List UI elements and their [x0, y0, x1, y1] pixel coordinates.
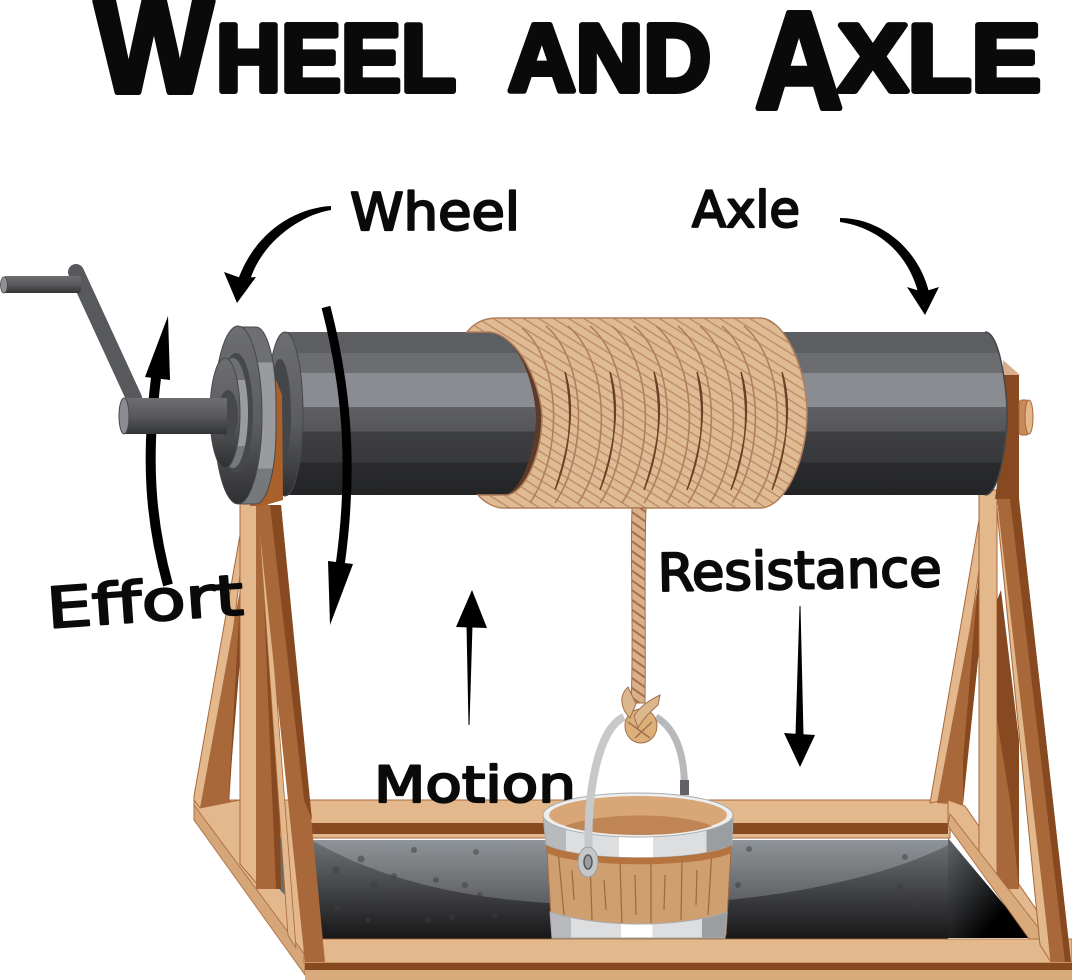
label: wheel: Wheel [350, 183, 520, 243]
wooden frame: right support [930, 360, 1052, 962]
title: HEEL [216, 5, 456, 112]
rotation arrow [326, 307, 353, 625]
wooden frame: back base [228, 800, 1032, 939]
left leg [257, 505, 325, 962]
hole sliver [280, 836, 288, 898]
title: AND [508, 5, 711, 112]
front handle [588, 717, 624, 860]
bucket body [543, 815, 733, 935]
resistance arrow [784, 606, 815, 767]
rope hanging [631, 508, 646, 703]
back handle [656, 717, 684, 795]
label: axle: Axle [692, 181, 800, 239]
right brace [930, 520, 979, 805]
arrow to wheel [224, 206, 331, 303]
label: motion: Motion [374, 756, 576, 814]
left post [240, 500, 257, 884]
rope knot [622, 687, 660, 743]
axle cylinder [283, 332, 1007, 495]
crank handle [0, 272, 227, 434]
bucket bottom metal band [550, 912, 727, 938]
wooden frame: left support [194, 500, 310, 975]
right leg [997, 499, 1071, 962]
bucket top metal band [543, 815, 733, 858]
rope coil shadows [555, 372, 787, 490]
bucket rim and inside [543, 793, 733, 837]
back rail [228, 800, 950, 838]
bucket [543, 717, 733, 938]
axle end block [995, 365, 1019, 499]
right post [979, 490, 997, 893]
well hole [312, 838, 1032, 939]
front base rail [304, 939, 1072, 980]
left brace [194, 535, 240, 808]
label: resistance: Resistance [657, 539, 942, 604]
post top behind wheel [250, 378, 283, 506]
base right side [948, 800, 1052, 962]
arrow to axle [840, 218, 939, 315]
base left side [194, 800, 310, 967]
title: XLE [838, 5, 1041, 112]
label: effort: Effort [44, 563, 245, 642]
rope coil on axle [467, 318, 807, 508]
motion arrow [456, 590, 487, 725]
inner second disc [267, 332, 303, 496]
effort arrow [145, 316, 170, 585]
peg [1019, 400, 1033, 435]
title [95, 0, 1041, 138]
wheel disc [210, 326, 276, 504]
